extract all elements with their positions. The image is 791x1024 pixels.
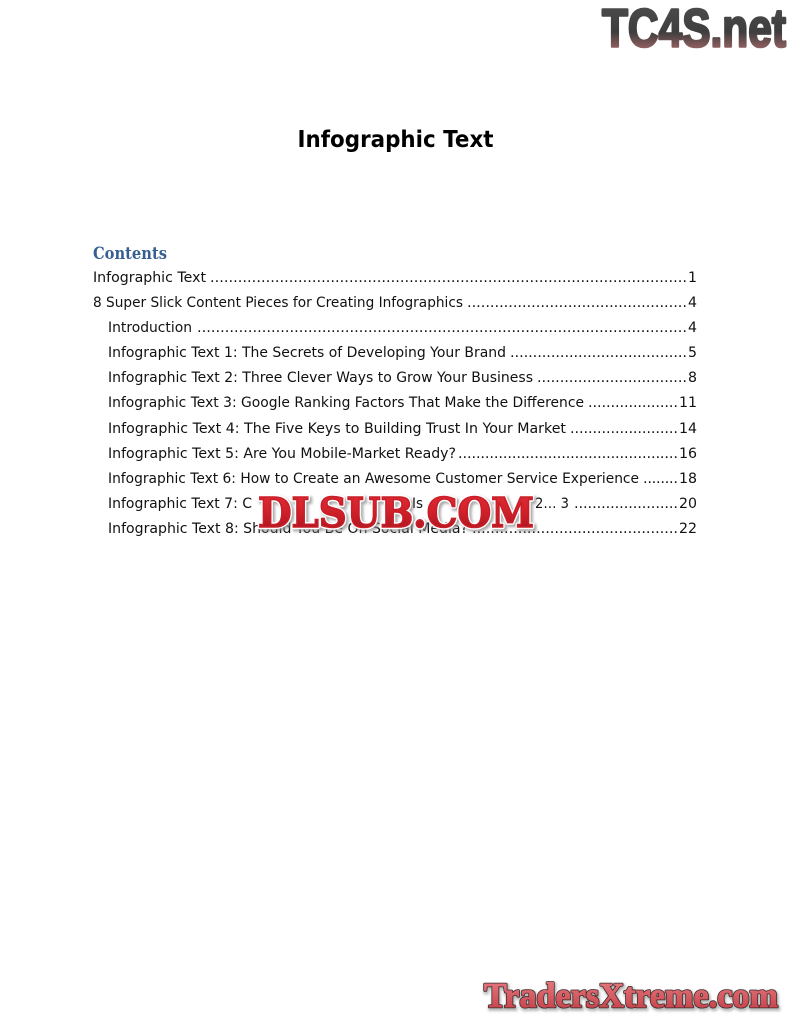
entry: Text 4: 14 bbox=[679, 421, 697, 437]
entry: Text 2: Infographic Text 2: Three Clever Ways to Grow Your Business bbox=[108, 370, 533, 386]
entry: Text 7 bbox=[108, 496, 697, 512]
entry: Text 8: ............................................. bbox=[472, 521, 678, 537]
heading: Contents: Contents bbox=[93, 244, 167, 263]
entry: Text 7: ....................... bbox=[574, 496, 678, 512]
watermark: TradersXtreme.com: TradersXtreme.com bbox=[485, 978, 779, 1017]
entry: Text 3: Infographic Text 3: Google Ranking Factors That Make the Difference bbox=[108, 395, 584, 411]
entry: Text 8: 22 bbox=[679, 521, 697, 537]
entry: Text 4: ........................ bbox=[570, 421, 678, 437]
entry: Text 7: 20 bbox=[679, 496, 697, 512]
entry: Text 3: 11 bbox=[679, 395, 697, 411]
entry: Introduction: 4 bbox=[688, 320, 697, 336]
entry: Infographic Text: 1 bbox=[688, 270, 697, 286]
entry: Text 8: Infographic Text 8: Should You Be On Social Media? bbox=[108, 521, 468, 537]
watermark: TradersXtreme.com: TradersXtreme.com bbox=[484, 976, 778, 1015]
entry: Infographic Text: ....................................................................................................... bbox=[210, 270, 687, 286]
entry: Text 4: Infographic Text 4: The Five Keys to Building Trust In Your Market bbox=[108, 421, 566, 437]
entry: 8 Super Slick Content Pieces: 4 bbox=[688, 295, 697, 311]
entry: Text 2: ................................. bbox=[537, 370, 687, 386]
entry: Text 1: Infographic Text 1: The Secrets of Developing Your Brand bbox=[108, 345, 506, 361]
entry: Text 1: 5 bbox=[688, 345, 697, 361]
entry: Introduction: .......................................................................................................... bbox=[197, 320, 687, 336]
entry: Text 5: Infographic Text 5: Are You Mobile-Market Ready? bbox=[108, 446, 456, 462]
entry: 8 Super Slick Content Pieces: ................................................ bbox=[467, 295, 687, 311]
entry: 8 Super Slick Content Pieces: 8 Super Slick Content Pieces for Creating Infographics bbox=[93, 295, 463, 311]
entry: Text 1: ....................................... bbox=[510, 345, 687, 361]
entry: Text 7: 2… 3 bbox=[535, 496, 569, 512]
title: Infographic Text bbox=[298, 125, 494, 153]
entry: Text 5: ................................................. bbox=[458, 446, 678, 462]
entry: Text 7: Is bbox=[412, 496, 423, 512]
table of contents bbox=[93, 270, 697, 537]
entry: Text 5: 16 bbox=[679, 446, 697, 462]
watermark: DLSUB.COM: DLSUB.COM bbox=[258, 489, 534, 537]
entry: Introduction: Introduction bbox=[108, 320, 192, 336]
watermark: DLSUB.COM: DLSUB.COM bbox=[260, 491, 536, 539]
entry: Infographic Text: Infographic Text bbox=[93, 270, 206, 286]
entry: Text 2: 8 bbox=[688, 370, 697, 386]
entry: Text 6: ........ bbox=[643, 471, 678, 487]
entry: Text 6: Infographic Text 6: How to Create an Awesome Customer Service Experience bbox=[108, 471, 639, 487]
watermark: TradersXtreme.com: TradersXtreme.com bbox=[484, 976, 778, 1015]
entry: Text 8 bbox=[108, 521, 697, 537]
entry: Text 7: Infographic Text 7: C bbox=[108, 496, 252, 512]
watermark: DLSUB.COM: DLSUB.COM bbox=[258, 489, 534, 537]
entry: 8 Super Slick Content Pieces bbox=[93, 295, 697, 311]
entry: Text 6: 18 bbox=[679, 471, 697, 487]
entry: Text 3: .................... bbox=[588, 395, 678, 411]
entry: Text 5 bbox=[108, 446, 697, 462]
